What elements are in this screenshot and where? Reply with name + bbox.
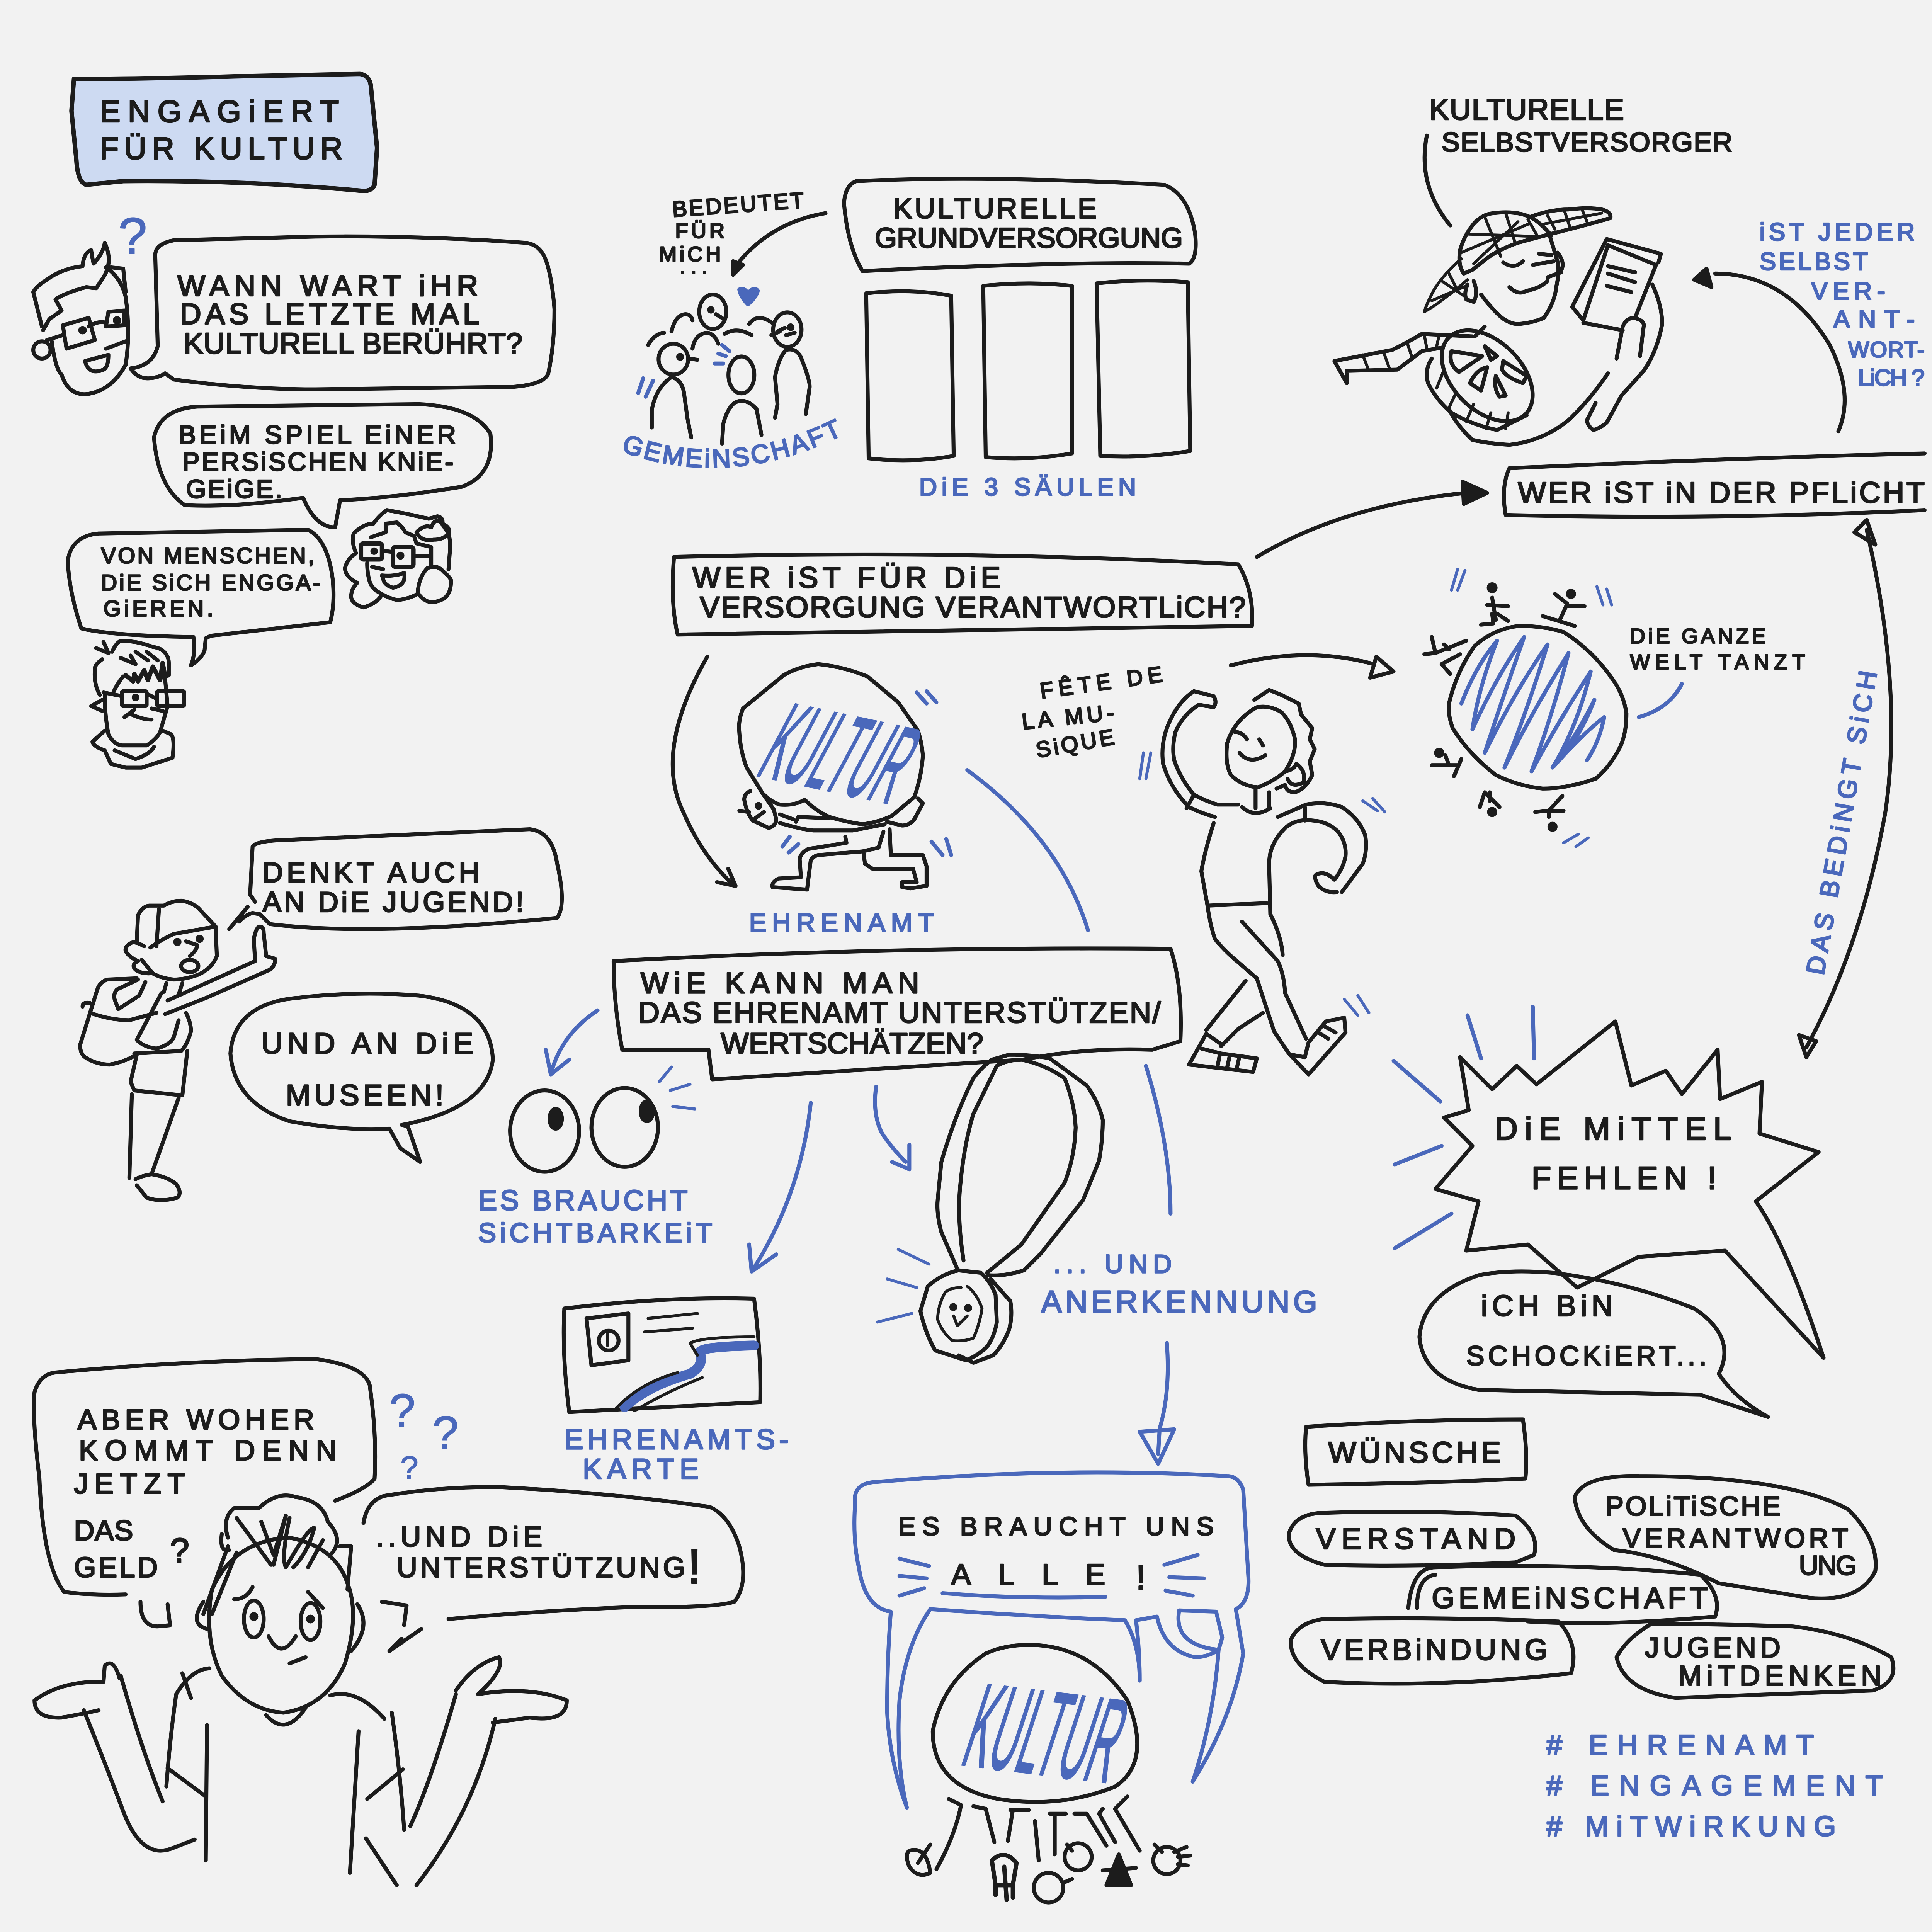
speech bubble: support: UNTERSTÜTZUNG — [397, 1552, 685, 1583]
bubble: verbindung: VERBiNDUNG — [1321, 1633, 1548, 1666]
bubble: verbindung — [1291, 1618, 1573, 1684]
icon: child with cap and backpack — [80, 901, 275, 1200]
label: es braucht sichtbarkeit — [478, 1184, 712, 1248]
arrow: to is everyone responsible — [1694, 269, 1845, 431]
panel: youth and museums — [80, 829, 562, 1200]
label: und anerkennung — [1041, 1250, 1317, 1319]
box: support question: DAS EHRENAMT UNTERSTÜTZEN/ — [638, 997, 1161, 1029]
speech bubble: committed people: GiEREN. — [104, 596, 213, 621]
speech bubble: question: WANN WART iHR — [177, 269, 478, 302]
bubble: jugend mitdenken — [1617, 1624, 1893, 1698]
icon: person with headscarf, book and film — [1334, 208, 1662, 445]
blue question marks: ? — [432, 1406, 459, 1459]
blue arrow: to visibility — [546, 1010, 598, 1075]
box: wer ist in der pflicht — [1504, 453, 1925, 517]
label: fete de la musique — [1020, 662, 1164, 763]
title: FÜR KULTUR — [100, 131, 342, 165]
bubble: gemeinschaft — [1408, 1566, 1717, 1623]
box: wer ist fuer die versorgung verantwortlich: VERSORGUNG VERANTWORTLiCH? — [700, 591, 1246, 624]
arrow: to community — [733, 213, 825, 275]
bubble tail — [141, 1602, 170, 1626]
blue question marks — [389, 1384, 459, 1486]
blue burst rays — [1394, 1007, 1534, 1248]
speech bubble: money: ? — [170, 1531, 189, 1570]
speech bubble: persian fiddle: PERSiSCHEN KNiE- — [182, 447, 453, 476]
panel: wie kann man das ehrenamt unterstuetzen — [478, 948, 1317, 1485]
panel: es braucht uns alle: KULTUR — [951, 1658, 1142, 1808]
icon: man with spiky hair — [91, 641, 184, 768]
label: und anerkennung: ANERKENNUNG — [1041, 1284, 1317, 1319]
label: es braucht sichtbarkeit: ES BRAUCHT — [478, 1184, 687, 1216]
speech bubble: money: GELD — [74, 1552, 158, 1583]
bubble: verstand — [1289, 1512, 1535, 1566]
box: kulturelle grundversorgung: GRUNDVERSORGUNG — [875, 222, 1183, 254]
icon: eyes — [510, 1067, 695, 1172]
speech bubble: support: ..UND DiE — [376, 1521, 542, 1553]
box: kulturelle grundversorgung — [844, 179, 1196, 271]
icon: ehrenamtskarte — [564, 1298, 760, 1412]
pointer line — [1425, 136, 1450, 226]
icon: boulder labelled kultur — [739, 664, 939, 826]
blue pointer line — [1639, 684, 1682, 717]
icon: community group — [638, 289, 810, 444]
panel: woher kommt das geld — [34, 1359, 743, 1885]
speech bubble: money: DAS — [74, 1515, 133, 1546]
speech bubble: schockiert — [1419, 1271, 1768, 1417]
arrow: to the world — [1231, 655, 1394, 678]
label: bedeutet fuer mich — [659, 188, 804, 278]
speech bubble: committed people: DiE SiCH ENGGA- — [101, 570, 320, 595]
icon: shrugging person — [34, 1495, 567, 1885]
blue question: ist jeder selbst verantwortlich: WORT- — [1848, 338, 1925, 362]
speech bubble: support — [364, 1487, 743, 1651]
label: die ganze welt tanzt: WELT TANZT — [1630, 651, 1805, 674]
double arrow: das bedingt sich — [1799, 520, 1891, 1057]
box: support question: WERTSCHÄTZEN? — [721, 1027, 983, 1060]
label: ehrenamtskarte: EHRENAMTS- — [564, 1423, 789, 1455]
blue question: ist jeder selbst verantwortlich: VER- — [1811, 277, 1885, 305]
speech bubble: support: ! — [687, 1539, 701, 1594]
bubble: politische verantwortung: UNG — [1799, 1550, 1857, 1580]
double arrow: das bedingt sich: DAS BEDiNGT SiCH — [1801, 668, 1883, 977]
bubble: jugend mitdenken: JUGEND — [1645, 1632, 1781, 1663]
bubble: politische verantwortung: POLiTiSCHE — [1605, 1491, 1781, 1521]
blue question: ist jeder selbst verantwortlich: iST JEDER — [1760, 218, 1915, 246]
speech bubble: schockiert: SCHOCKiERT... — [1466, 1340, 1706, 1371]
speech bubble: persian fiddle: BEiM SPIEL EiNER — [179, 420, 456, 449]
blue connector line — [967, 770, 1088, 930]
bubble: verstand: VERSTAND — [1316, 1522, 1515, 1555]
box: wer ist fuer die versorgung verantwortlich — [673, 554, 1252, 634]
text: es braucht uns alle: ES BRAUCHT UNS — [898, 1512, 1214, 1541]
speech bubble: youth: AN DiE JUGEND! — [262, 886, 524, 918]
label: ehrenamtskarte: KARTE — [583, 1453, 699, 1485]
blue arrow: to card — [749, 1103, 811, 1272]
label: fete de la musique: SiQUE — [1034, 724, 1116, 763]
sketchnote canvas: KULTUR — [742, 681, 939, 826]
arrow: to ehrenamt — [673, 657, 736, 886]
speech bubble: museums — [230, 993, 493, 1162]
heading: selbstversorger: KULTURELLE — [1429, 93, 1624, 126]
pillars — [866, 281, 1190, 460]
speech bubble: money: KOMMT DENN — [79, 1435, 337, 1466]
label: ehrenamt: EHRENAMT — [749, 908, 934, 937]
speech bubble: money: JETZT — [74, 1468, 185, 1500]
text: es braucht uns alle: ! — [1136, 1558, 1146, 1597]
blue speech bubble with tails — [854, 1472, 1248, 1808]
hashtags — [1546, 1729, 1883, 1842]
speech bubble: money — [34, 1359, 375, 1595]
hashtags: # MiTWiRKUNG — [1546, 1810, 1836, 1842]
label: bedeutet fuer mich: ... — [680, 257, 707, 278]
bubble: gemeinschaft: GEMEiNSCHAFT — [1432, 1582, 1708, 1614]
speech bubble: museums: UND AN DiE — [261, 1027, 473, 1060]
box: wuensche — [1305, 1419, 1526, 1485]
label: es braucht sichtbarkeit: SiCHTBARKEiT — [478, 1217, 712, 1248]
burst: FEHLEN ! — [1532, 1160, 1716, 1196]
bubble: politische verantwortung: VERANTWORT — [1623, 1523, 1848, 1553]
blue question marks: ? — [389, 1384, 415, 1437]
blue arrow: to es braucht uns alle — [1140, 1343, 1174, 1464]
heading: selbstversorger — [1429, 93, 1732, 157]
speech bubble: question: KULTURELL BERÜHRT? — [184, 327, 522, 360]
bubble: jugend mitdenken: MiTDENKEN — [1678, 1660, 1881, 1692]
panel: ehrenamt carrying culture — [739, 664, 951, 937]
speech bubble: schockiert: iCH BiN — [1481, 1290, 1613, 1323]
burst: DiE MiTTEL — [1495, 1111, 1731, 1147]
icon: carrying figure — [739, 691, 951, 889]
label: die 3 saeulen: DiE 3 SÄULEN — [919, 473, 1136, 501]
blue question: ist jeder selbst verantwortlich: ANT- — [1833, 305, 1915, 333]
box: wer ist fuer die versorgung verantwortlich: WER iST FÜR DiE — [692, 561, 1000, 594]
speech bubble: question — [131, 236, 554, 389]
hashtags: # EHRENAMT — [1546, 1729, 1814, 1761]
panel: die 3 saeulen — [619, 179, 1196, 501]
blue question: ist jeder selbst verantwortlich: SELBST — [1760, 247, 1868, 275]
label: die ganze welt tanzt — [1630, 625, 1805, 674]
icon: man with glasses — [33, 243, 128, 394]
blue question marks: ? — [400, 1450, 418, 1486]
text: es braucht uns alle — [898, 1512, 1214, 1597]
speech bubble: youth: DENKT AUCH — [262, 857, 479, 888]
icon: medal — [877, 1055, 1103, 1363]
speech bubble: persian fiddle: GEiGE. — [186, 474, 282, 503]
heading: selbstversorger: SELBSTVERSORGER — [1442, 127, 1732, 157]
panel: opening dialogue — [33, 207, 554, 768]
title: ENGAGiERT — [100, 94, 339, 129]
panel: es braucht uns alle — [854, 1472, 1248, 1902]
speech bubble: museums: MUSEEN! — [286, 1079, 444, 1112]
label: gemeinschaft: GEMEiNSCHAFT — [619, 414, 845, 473]
blue question: ist jeder selbst verantwortlich: LiCH ? — [1858, 364, 1925, 391]
icon: dancing world — [1424, 569, 1626, 847]
label: bedeutet fuer mich: BEDEUTET — [672, 188, 804, 222]
box: wuensche: WÜNSCHE — [1328, 1436, 1501, 1469]
box: kulturelle grundversorgung: KULTURELLE — [893, 192, 1097, 224]
label: fete de la musique: FÊTE DE — [1038, 662, 1164, 704]
speech bubble: committed people: VON MENSCHEN, — [101, 543, 314, 568]
box: support question: WiE KANN MAN — [641, 967, 919, 1000]
speech bubble: youth — [229, 829, 562, 929]
hashtags: # ENGAGEMENT — [1546, 1770, 1883, 1801]
text: es braucht uns alle: ALLE — [951, 1558, 1105, 1591]
icon: dancing woman — [1140, 690, 1385, 1075]
blue connector line — [1146, 1066, 1170, 1214]
box: support question — [614, 948, 1181, 1079]
label: und anerkennung: ... UND — [1053, 1250, 1172, 1279]
icon: blue question mark: ? — [118, 207, 147, 265]
speech bubble: money: ABER WOHER — [78, 1404, 314, 1435]
label: fete de la musique: LA MU- — [1020, 700, 1115, 735]
blue arrow: to medal — [875, 1087, 909, 1169]
arrow: to wer ist in der pflicht — [1257, 482, 1487, 557]
blue question: ist jeder selbst verantwortlich — [1760, 218, 1925, 391]
panel: fete de la musique — [1020, 569, 1805, 1075]
panel: wuensche — [1289, 1419, 1893, 1842]
title — [71, 74, 377, 191]
speech bubble: persian fiddle — [154, 404, 491, 527]
label: bedeutet fuer mich: MiCH — [659, 243, 721, 266]
panel: die mittel fehlen — [1394, 1007, 1823, 1417]
speech bubble: question: DAS LETZTE MAL — [180, 298, 479, 331]
label: die ganze welt tanzt: DiE GANZE — [1630, 625, 1766, 648]
burst — [1435, 1021, 1823, 1358]
bubble: politische verantwortung — [1575, 1476, 1876, 1599]
icon: woman with curly hair and glasses — [345, 510, 451, 607]
emphasis lines and underline — [900, 1555, 1204, 1597]
label: bedeutet fuer mich: FÜR — [675, 219, 724, 242]
icon: boulder labelled kultur — [933, 1645, 1142, 1808]
icon: crowd carrying culture — [907, 1796, 1190, 1902]
box: wer ist in der pflicht: WER iST iN DER PFLiCHT — [1518, 476, 1925, 509]
panel: kulturelle selbstversorger — [1334, 93, 1925, 445]
speech bubble: committed people — [68, 530, 333, 665]
label: ehrenamtskarte — [564, 1423, 789, 1485]
